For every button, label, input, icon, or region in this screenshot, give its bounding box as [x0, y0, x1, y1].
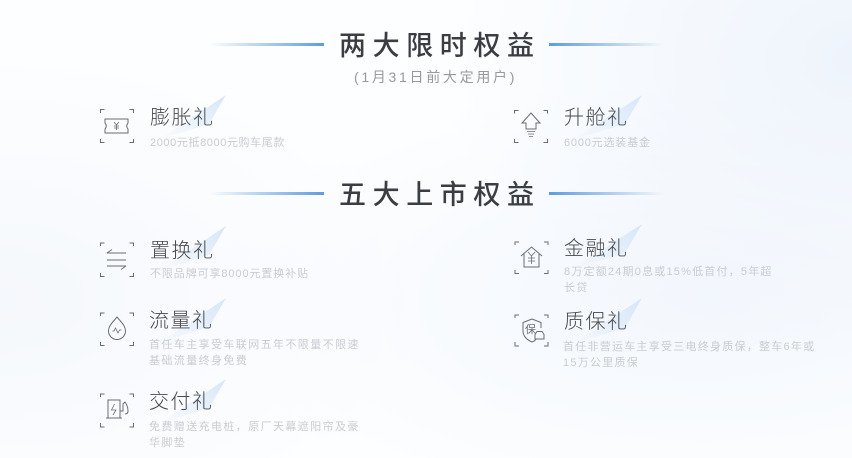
description: 免费赠送充电桩，原厂天幕遮阳帘及豪 — [149, 421, 360, 433]
heading: two limited-time benefits: 两大限时权益 — [339, 31, 541, 61]
title: 置换礼 — [150, 240, 214, 262]
left heading line — [209, 43, 324, 46]
description — [564, 266, 773, 294]
item: 置换礼 — [100, 226, 309, 280]
title: 交付礼 — [149, 391, 214, 413]
item: 交付礼 — [100, 379, 360, 449]
description: 2000元抵8000元购车尾款 — [150, 137, 285, 149]
item: 升舱礼 — [514, 95, 651, 149]
icon: charging pile — [100, 379, 226, 428]
description: 6000元选装基金 — [564, 137, 651, 149]
icon: ticket — [100, 95, 226, 143]
title: 膨胀礼 — [150, 107, 214, 129]
subtitle: (1月31日前大定用户) — [354, 69, 517, 85]
description — [149, 338, 360, 367]
description: 15万公里质保 — [563, 357, 639, 369]
item: 质保礼 — [514, 298, 815, 369]
icon: swap arrows — [100, 226, 226, 277]
item: 流量礼 — [100, 298, 360, 367]
description: 不限品牌可享8000元置换补贴 — [150, 268, 309, 280]
description — [149, 420, 360, 449]
description: 基础流量终身免费 — [149, 355, 248, 367]
right heading line — [549, 192, 664, 195]
description: 首任非营运车主享受三电终身质保，整车6年或 — [563, 341, 815, 353]
title: 质保礼 — [564, 311, 628, 333]
icon: house with yen — [514, 224, 642, 274]
icon: water drop with pulse — [100, 298, 226, 346]
icon: warranty shield — [514, 298, 642, 346]
right heading line — [549, 43, 664, 46]
title: 流量礼 — [149, 310, 214, 332]
left heading line — [209, 192, 324, 195]
icon: upgrade arrow — [514, 95, 642, 143]
title: 升舱礼 — [564, 107, 628, 129]
description: 首任车主享受车联网五年不限量不限速 — [149, 339, 360, 351]
icon glyph: 保 — [525, 324, 536, 336]
item: 金融礼 — [514, 224, 773, 294]
description: 华脚垫 — [149, 437, 186, 449]
item: 膨胀礼 — [100, 95, 285, 149]
title: 金融礼 — [564, 238, 628, 260]
heading: five launch benefits: 五大上市权益 — [339, 180, 541, 210]
description — [563, 340, 815, 369]
description: 8万定额24期0息或15%低首付，5年超 — [564, 266, 773, 278]
description: 长贷 — [564, 282, 588, 294]
